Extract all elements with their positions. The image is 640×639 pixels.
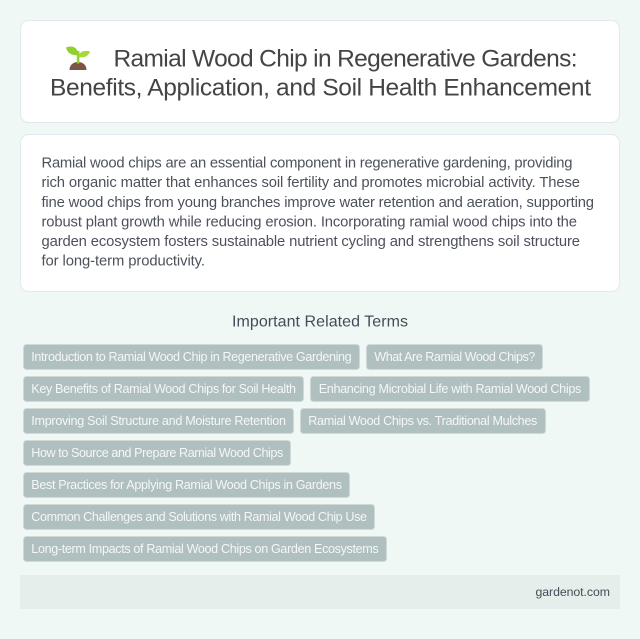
- tag: long-term impacts: [24, 536, 386, 562]
- title: [50, 46, 591, 102]
- tag: source and prepare: How to Source and Prepare Ramial Wood Chips: [31, 446, 283, 460]
- tag: what are ramial wood chips: [366, 344, 542, 370]
- tag: long-term impacts: Long-term Impacts of Ramial Wood Chips on Garden Ecosystems: [31, 542, 379, 556]
- tag: key benefits: [24, 376, 304, 402]
- tag: key benefits: Key Benefits of Ramial Wood Chips for Soil Health: [31, 382, 296, 396]
- panel: description card: [20, 134, 620, 292]
- tag: source and prepare: [24, 440, 290, 466]
- tag: microbial life: Enhancing Microbial Life with Ramial Wood Chips: [319, 382, 581, 396]
- footer: [20, 575, 620, 609]
- text block: description: for long-term productivity.: [42, 254, 205, 270]
- tag: versus mulches: Ramial Wood Chips vs. Traditional Mulches: [308, 414, 537, 428]
- tag: soil structure: Improving Soil Structure and Moisture Retention: [31, 414, 286, 428]
- tag: common challenges: [24, 504, 374, 530]
- footer: gardenot.com: [536, 585, 610, 599]
- tag: best practices: Best Practices for Applying Ramial Wood Chips in Gardens: [31, 478, 342, 492]
- title: Benefits, Application, and Soil Health Enhancement: [50, 74, 591, 102]
- text block: description: garden ecosystem fosters sustainable nutrient cycling and strengthens soil structure: [42, 234, 580, 250]
- text block: description: [42, 156, 594, 270]
- panel: title card: [20, 20, 620, 122]
- tag: common challenges: Common Challenges and Solutions with Ramial Wood Chip Use: [31, 510, 367, 524]
- tag: introduction: [24, 344, 360, 370]
- tag: what are ramial wood chips: What Are Ramial Wood Chips?: [374, 350, 535, 364]
- text block: description: rich organic matter that enhances soil fertility and promotes microbial activity. These: [42, 175, 580, 191]
- heading: important related terms: Important Related Terms: [232, 314, 408, 330]
- text block: description: Ramial wood chips are an essential component in regenerative gardening, providing: [42, 156, 572, 172]
- text block: description: robust plant growth while reducing erosion. Incorporating ramial wood chips into the: [42, 214, 577, 230]
- tag: best practices: [24, 472, 350, 498]
- tag: microbial life: [310, 376, 590, 402]
- title: Ramial Wood Chip in Regenerative Gardens:: [114, 46, 578, 72]
- tag: introduction: Introduction to Ramial Wood Chip in Regenerative Gardening: [31, 350, 352, 364]
- icon: sprout: [66, 46, 90, 70]
- panel: related term tags: [24, 344, 590, 562]
- text block: description: fine wood chips from young branches improve water retention and aeration, supporting: [42, 195, 594, 211]
- tag: versus mulches: [300, 408, 546, 434]
- tag: soil structure: [24, 408, 294, 434]
